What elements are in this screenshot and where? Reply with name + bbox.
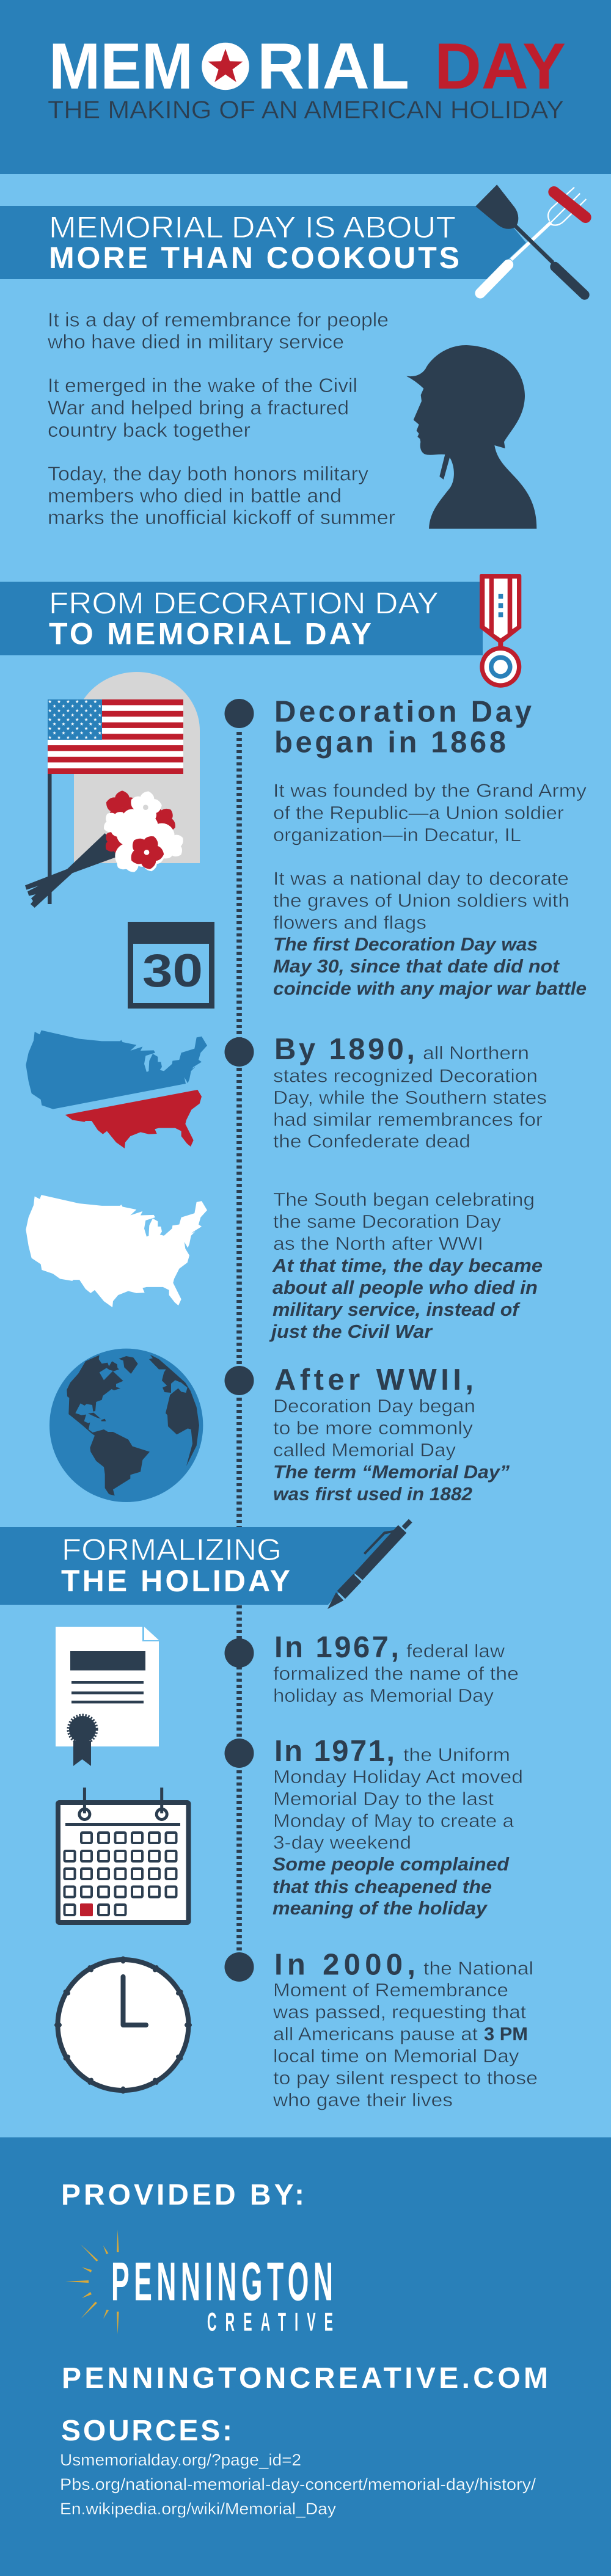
text: what the day is about: country back together <box>48 419 251 441</box>
entry: in 1971 <box>273 1735 523 1919</box>
entry: by 1890: states recognized Decoration <box>273 1065 538 1086</box>
entry: in 2000: In 2000, <box>274 1949 415 1982</box>
entry: in 1971: meaning of the holiday <box>273 1897 488 1919</box>
entry: in 2000: Moment of Remembrance <box>273 1979 508 2001</box>
entry: Decoration Day began in 1868: began in 1868 <box>274 726 506 759</box>
entry: after WWII <box>273 1363 510 1505</box>
entry: Decoration Day began in 1868: organization—in Decatur, IL <box>273 824 521 845</box>
banner heading <box>0 206 526 279</box>
entry: the south after WWI: The South began celebrating <box>273 1189 535 1210</box>
title: Memorial Day: DAY <box>434 29 566 103</box>
entry: the south after WWI: military service, instead of <box>273 1299 521 1320</box>
panel: header <box>0 0 611 174</box>
entry: in 2000: was passed, requesting that <box>273 2001 526 2023</box>
banner heading: FROM DECORATION DAY <box>49 586 439 621</box>
heading: provided by: PROVIDED BY: <box>61 2179 304 2211</box>
entry: in 1971: In 1971, <box>274 1735 395 1768</box>
timeline bullet <box>225 1037 254 1067</box>
entry: by 1890: By 1890, <box>274 1033 415 1066</box>
logo: Pennington Creative: CREATIVE <box>207 2307 333 2337</box>
entry: in 1971: Memorial Day to the last <box>273 1788 494 1809</box>
banner heading: MORE THAN COOKOUTS <box>49 241 459 275</box>
heading: sources: SOURCES: <box>61 2415 232 2447</box>
entry: by 1890 <box>273 1033 547 1152</box>
entry: in 1967: holiday as Memorial Day <box>273 1685 494 1706</box>
entry: in 2000: who gave their lives <box>273 2089 453 2111</box>
entry: after WWII: Decoration Day began <box>273 1395 475 1417</box>
text: what the day is about: members who died in battle and <box>48 485 342 507</box>
timeline bullet <box>225 1638 254 1668</box>
icon: gravestone <box>74 672 200 863</box>
entry: Decoration Day began in 1868: May 30, since that date did not <box>273 955 560 977</box>
entry: in 2000: 3 PM <box>484 2023 528 2045</box>
text: what the day is about: marks the unofficial kickoff of summer <box>48 506 395 528</box>
entry: Decoration Day began in 1868: coincide with any major war battle <box>273 978 587 999</box>
logo: Pennington Creative: PENNINGTON <box>111 2250 333 2311</box>
text: what the day is about: It emerged in the wake of the Civil <box>48 374 357 396</box>
icon: calendar showing 30: 30 <box>142 945 203 997</box>
source list: Usmemorialday.org/?page_id=2 <box>60 2451 301 2469</box>
entry: in 1971: that this cheapened the <box>273 1876 492 1897</box>
entry: the south after WWI: the same Decoration Day <box>273 1211 502 1232</box>
icon: globe <box>49 1349 203 1502</box>
entry: by 1890: Day, while the Southern states <box>273 1087 547 1108</box>
entry: in 1971: 3-day weekend <box>273 1831 411 1853</box>
panel: footer <box>0 2137 611 2576</box>
entry: in 2000: to pay silent respect to those <box>273 2067 538 2089</box>
entry: in 1967: formalized the name of the <box>273 1663 519 1684</box>
entry: after WWII: After WWII, <box>274 1363 474 1396</box>
entry: in 1967: In 1967, <box>274 1631 399 1664</box>
icon: calendar showing 30 <box>128 922 214 1005</box>
text: what the day is about: who have died in military service <box>47 331 344 353</box>
entry: after WWII: called Memorial Day <box>273 1439 456 1461</box>
entry: in 1971: the Uniform <box>403 1744 510 1765</box>
icon: bouquet of flowers <box>25 788 191 908</box>
subtitle: THE MAKING OF AN AMERICAN HOLIDAY <box>48 95 564 123</box>
banner heading <box>0 582 483 655</box>
entry: Decoration Day began in 1868 <box>273 696 587 999</box>
timeline bullet <box>225 1952 254 1982</box>
entry: in 2000: all Americans pause at <box>273 2023 478 2045</box>
banner heading: THE HOLIDAY <box>61 1564 290 1598</box>
entry: the south after WWI: just the Civil War <box>269 1321 433 1342</box>
banner heading: TO MEMORIAL DAY <box>49 617 371 651</box>
timeline bullet <box>225 699 254 728</box>
text: what the day is about: Today, the day both honors military <box>48 463 368 485</box>
entry: by 1890: had similar remembrances for <box>273 1109 543 1130</box>
icon: united states map <box>26 1195 207 1307</box>
source list: En.wikipedia.org/wiki/Memorial_Day <box>60 2500 337 2518</box>
entry: the south after WWI <box>269 1189 543 1342</box>
entry: after WWII: The term “Memorial Day” <box>273 1461 510 1483</box>
entry: in 1967: federal law <box>406 1640 505 1662</box>
text: what the day is about <box>47 309 395 528</box>
banner heading: MEMORIAL DAY IS ABOUT <box>49 210 456 244</box>
icon: document with seal <box>56 1627 159 1766</box>
entry: after WWII: to be more commonly <box>273 1417 474 1439</box>
icon: calendar with red day <box>58 1787 188 1922</box>
panel: formalizing the holiday <box>0 1519 538 2111</box>
source list <box>60 2451 536 2518</box>
entry: in 1967 <box>273 1631 519 1706</box>
entry: Decoration Day began in 1868: the graves of Union soldiers with <box>273 890 569 911</box>
entry: Decoration Day began in 1868: of the Republic—a Union soldier <box>273 802 564 823</box>
banner heading <box>0 1527 397 1605</box>
icon: pen <box>327 1519 412 1609</box>
icon: clock at 3 o'clock <box>56 1958 189 2092</box>
panel: more than cookouts <box>0 184 586 529</box>
entry: the south after WWI: about all people who died in <box>273 1277 538 1298</box>
entry: Decoration Day began in 1868: It was founded by the Grand Army <box>273 780 587 801</box>
entry: in 1971: Monday of May to create a <box>273 1810 514 1831</box>
panel: from decoration day to memorial day <box>0 574 587 1505</box>
entry: by 1890: the Confederate dead <box>273 1131 470 1152</box>
timeline dotted line <box>236 732 242 1955</box>
icon: star in the letter O <box>202 43 249 90</box>
title: Memorial Day: MEM <box>49 29 193 103</box>
website address: PENNINGTONCREATIVE.COM <box>62 2362 548 2395</box>
text: what the day is about: War and helped bring a fractured <box>48 397 349 419</box>
banner heading: FORMALIZING <box>62 1533 282 1567</box>
entry: in 1971: Monday Holiday Act moved <box>273 1766 523 1787</box>
title: Memorial Day <box>49 29 566 103</box>
entry: in 2000: the National <box>423 1957 533 1979</box>
entry: by 1890: all Northern <box>423 1042 529 1064</box>
timeline bullet <box>225 1366 254 1395</box>
icon: map of north and south <box>26 1031 207 1148</box>
icon: soldier silhouette <box>406 345 536 529</box>
entry: in 2000: local time on Memorial Day <box>273 2045 519 2067</box>
entry: Decoration Day began in 1868: The first Decoration Day was <box>273 933 538 955</box>
entry: Decoration Day began in 1868: Decoration Day <box>274 696 532 729</box>
text: what the day is about: It is a day of remembrance for people <box>48 309 389 331</box>
logo: Pennington Creative <box>65 2230 333 2337</box>
timeline bullet <box>225 1739 254 1768</box>
entry: in 1971: Some people complained <box>273 1853 510 1875</box>
title: Memorial Day: RIAL <box>257 29 409 103</box>
entry: in 2000 <box>273 1949 538 2111</box>
icon: american flag <box>48 699 183 904</box>
source list: Pbs.org/national-memorial-day-concert/memorial-day/history/ <box>60 2475 536 2494</box>
entry: Decoration Day began in 1868: flowers and flags <box>273 911 426 933</box>
entry: after WWII: was first used in 1882 <box>273 1483 472 1505</box>
entry: the south after WWI: At that time, the day became <box>272 1255 543 1276</box>
entry: Decoration Day began in 1868: It was a national day to decorate <box>273 867 569 889</box>
entry: the south after WWI: as the North after WWI <box>273 1233 483 1254</box>
icon: medal <box>480 574 521 688</box>
icon: grilling fork, spatula and sausage <box>475 184 586 295</box>
